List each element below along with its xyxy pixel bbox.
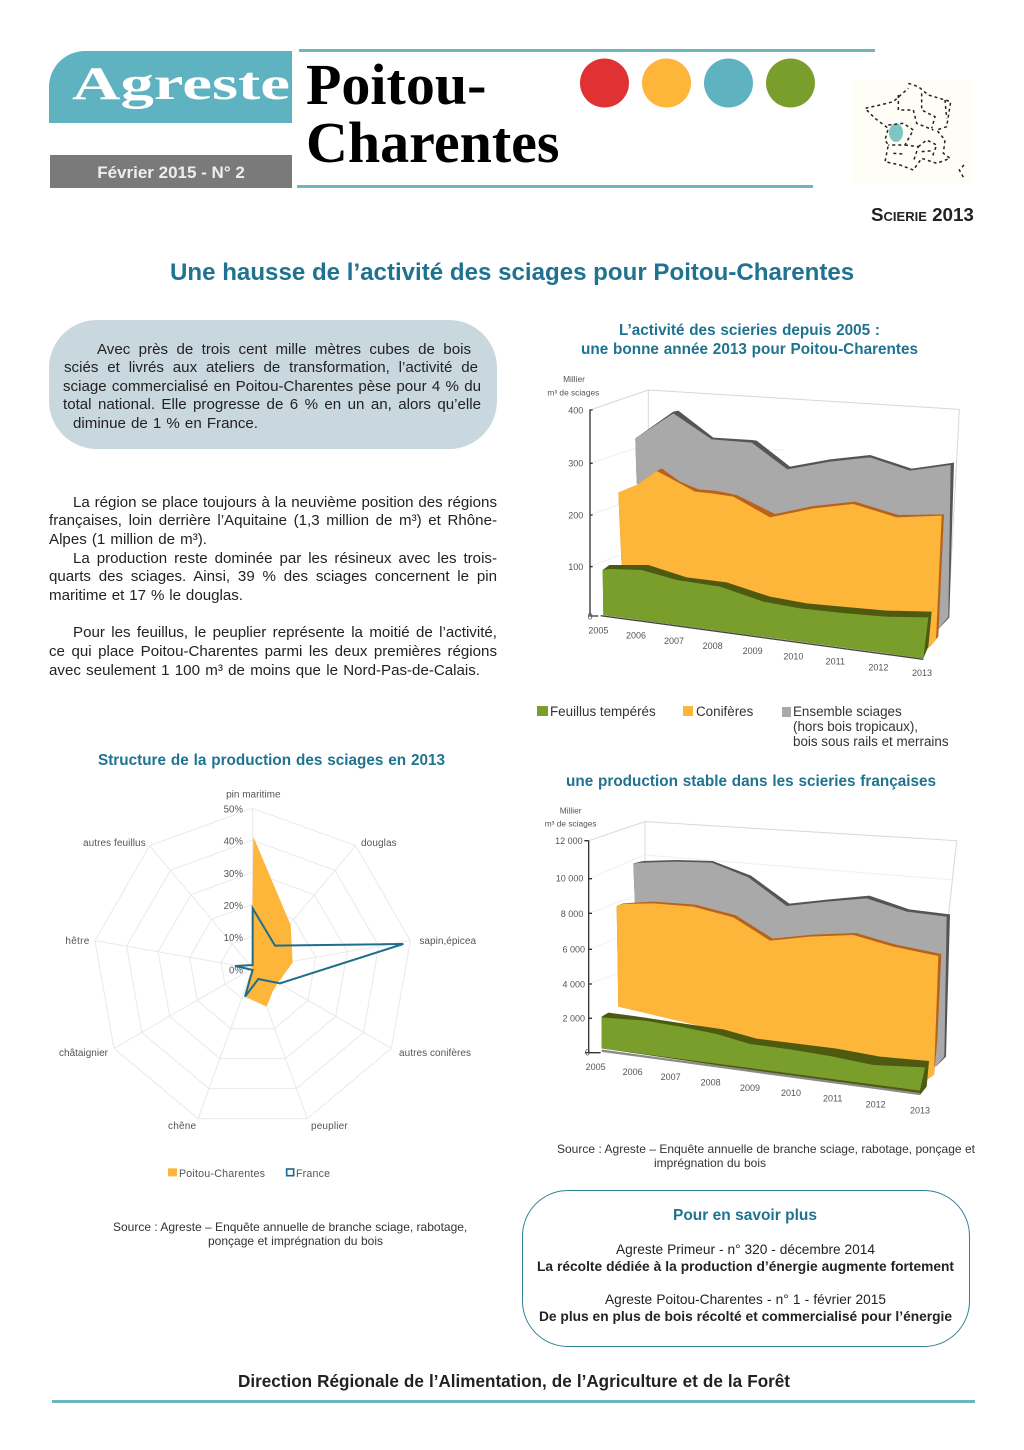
y axis labels: 200 <box>568 510 583 520</box>
body text: Alpes (1 million de m³). <box>49 531 207 548</box>
radial scale: 10% <box>224 933 243 944</box>
y axis labels: 0 <box>588 611 593 621</box>
x axis labels <box>586 1062 930 1115</box>
y axis <box>584 841 601 1053</box>
body text: La région se place toujours à la neuvième position des régions <box>73 494 497 511</box>
date band: Février 2015 - N° 2 <box>97 163 245 182</box>
category labels: peuplier <box>311 1121 348 1132</box>
body text: ce qui place Poitou-Charentes parmi les deux premières régions <box>49 643 497 660</box>
intro text <box>63 341 481 432</box>
x axis labels: 2013 <box>910 1105 930 1115</box>
y axis labels <box>555 836 590 1058</box>
radar heading: Structure de la production des sciages en 2013 <box>98 752 445 769</box>
reference 2: De plus en plus de bois récolté et commercialisé pour l’énergie <box>539 1309 952 1324</box>
x axis labels: 2010 <box>781 1088 801 1098</box>
intro text: sciés et livrés aux ateliers de transformation, l’activité de <box>64 359 478 376</box>
category labels: autres conifères <box>399 1048 471 1059</box>
chart: area 3D regional sawmill activity <box>547 374 960 678</box>
legend: ensemble: bois sous rails et merrains <box>793 734 949 749</box>
category labels: châtaignier <box>59 1048 109 1059</box>
further reading heading: Pour en savoir plus <box>673 1207 817 1224</box>
unit label: Millier <box>563 374 585 384</box>
header title: Poitou- <box>306 52 486 117</box>
radial scale: 50% <box>224 804 243 815</box>
radar legend: Poitou-Charentes <box>179 1168 265 1180</box>
body text: françaises, loin derrière l’Aquitaine (1,3 million de m³) et Rhône- <box>49 512 497 529</box>
y axis labels: 10 000 <box>556 873 583 883</box>
y axis labels: 4 000 <box>562 979 585 989</box>
radial scale: 40% <box>224 836 243 847</box>
source radar <box>113 1220 467 1248</box>
source chart 2 <box>557 1142 975 1170</box>
radar legend: France <box>296 1168 330 1180</box>
source chart 2: imprégnation du bois <box>654 1156 766 1170</box>
x axis labels: 2011 <box>826 656 845 666</box>
intro text: sciage commercialisé en Poitou-Charentes pèse pour 4 % du <box>63 378 481 395</box>
legend: ensemble: (hors bois tropicaux), <box>793 719 918 734</box>
unit label <box>545 805 597 828</box>
radial scale: 0% <box>229 965 243 976</box>
category labels: douglas <box>361 838 397 849</box>
x axis labels <box>588 625 932 678</box>
section label: Scierie 2013 <box>871 204 974 225</box>
x axis labels: 2009 <box>743 646 763 656</box>
footer rule <box>52 1400 975 1403</box>
intro text: diminue de 1 % en France. <box>73 415 258 432</box>
source radar: Source : Agreste – Enquête annuelle de branche sciage, rabotage, <box>113 1220 467 1234</box>
reference 2: Agreste Poitou-Charentes - n° 1 - février 2015 <box>605 1292 886 1307</box>
series: feuillus temperes <box>603 565 932 658</box>
x axis labels: 2006 <box>623 1067 643 1077</box>
y axis labels: 300 <box>568 459 583 469</box>
x axis labels: 2006 <box>626 630 646 640</box>
icon: map of France with Poitou-Charentes highlighted <box>854 80 973 183</box>
x axis labels: 2013 <box>912 668 932 678</box>
body text: Pour les feuillus, le peuplier représente la moitié de l’activité, <box>73 624 497 641</box>
series: ensemble sciages <box>633 860 950 1067</box>
legend: feuillus: Feuillus tempérés <box>550 704 656 719</box>
reference 1 <box>537 1242 954 1274</box>
body text: La production reste dominée par les résineux avec les trois- <box>73 550 497 567</box>
y axis labels: 100 <box>568 562 583 572</box>
series: France <box>235 908 403 997</box>
reference 2 <box>539 1292 952 1324</box>
header title: Charentes <box>306 110 559 175</box>
x axis labels: 2012 <box>866 1099 886 1109</box>
x axis labels: 2005 <box>588 625 608 635</box>
y axis labels: 0 <box>585 1048 590 1058</box>
body text: maritime et 17 % le douglas. <box>49 587 243 604</box>
intro text: total national. Elle progresse de 6 % en un an, alors qu’elle <box>63 396 481 413</box>
x axis labels: 2005 <box>586 1062 606 1072</box>
series: ensemble sciages <box>635 411 954 629</box>
x axis labels: 2007 <box>664 636 684 646</box>
x axis labels: 2008 <box>703 641 723 651</box>
chart 1 heading <box>581 322 918 358</box>
chart 1 heading: une bonne année 2013 pour Poitou-Charentes <box>581 341 918 358</box>
header: Agreste logo block <box>49 51 292 123</box>
x axis labels: 2011 <box>823 1094 842 1104</box>
category labels: chêne <box>168 1121 196 1132</box>
legend: coniferes: Conifères <box>696 704 753 719</box>
radar legend <box>168 1168 330 1180</box>
x axis labels: 2012 <box>868 663 888 673</box>
category labels <box>59 789 476 1132</box>
y axis labels: 6 000 <box>562 945 585 955</box>
intro text: Avec près de trois cent mille mètres cubes de bois <box>97 341 471 358</box>
series: feuillus temperes <box>602 1013 929 1095</box>
x axis labels: 2009 <box>740 1083 760 1093</box>
body text: quarts des sciages. Ainsi, 39 % des sciages concernent le pin <box>49 568 497 585</box>
header rule top <box>299 49 875 52</box>
chart 1 legend <box>537 704 949 749</box>
y axis <box>589 410 598 617</box>
radial scale: 30% <box>224 869 243 880</box>
unit label: Millier <box>560 805 582 815</box>
chart: radar structure of production <box>59 789 476 1180</box>
reference 1: La récolte dédiée à la production d’énergie augmente fortement <box>537 1259 954 1274</box>
x axis labels: 2010 <box>783 651 803 661</box>
body text <box>49 494 497 679</box>
radial scale: 20% <box>224 901 243 912</box>
legend: ensemble <box>782 704 949 749</box>
unit label: m³ de sciages <box>547 388 599 398</box>
legend: ensemble: Ensemble sciages <box>793 704 902 719</box>
header rule bottom <box>297 185 813 188</box>
date band <box>50 155 292 188</box>
chart: area 3D French sawmills <box>545 805 958 1115</box>
y axis labels: 12 000 <box>555 836 583 846</box>
x axis labels: 2008 <box>701 1078 721 1088</box>
source radar: ponçage et imprégnation du bois <box>208 1234 383 1248</box>
category labels: pin maritime <box>226 789 281 800</box>
category labels: sapin,épicea <box>419 936 476 947</box>
panel: further reading <box>522 1190 970 1347</box>
category labels: hêtre <box>65 936 90 947</box>
category labels: autres feuillus <box>83 838 146 849</box>
body text: avec seulement 1 100 m³ de moins que le Nord-Pas-de-Calais. <box>49 662 480 679</box>
chart 1 heading: L’activité des scieries depuis 2005 : <box>619 322 880 339</box>
x axis labels: 2007 <box>661 1072 681 1082</box>
series: coniferes <box>618 468 944 648</box>
coloured dots <box>580 58 815 108</box>
panel: intro box <box>49 320 497 449</box>
reference 1: Agreste Primeur - n° 320 - décembre 2014 <box>616 1242 875 1257</box>
unit label: m³ de sciages <box>545 818 597 828</box>
chart 2 heading: une production stable dans les scieries françaises <box>566 773 936 790</box>
y axis labels: 8 000 <box>561 909 583 919</box>
y axis labels: 400 <box>568 405 583 415</box>
unit label <box>547 374 599 398</box>
y axis labels <box>568 405 593 621</box>
series: coniferes <box>617 902 941 1080</box>
header title <box>306 52 559 175</box>
footer text: Direction Régionale de l’Alimentation, de l’Agriculture et de la Forêt <box>238 1372 790 1391</box>
radial scale <box>224 804 243 976</box>
main heading: Une hausse de l’activité des sciages pour Poitou-Charentes <box>170 259 854 286</box>
series: Poitou-Charentes <box>245 837 293 1007</box>
source chart 2: Source : Agreste – Enquête annuelle de branche sciage, rabotage, ponçage et <box>557 1142 975 1156</box>
y axis labels: 2 000 <box>562 1014 585 1024</box>
header: Agreste logo block: Agreste <box>72 58 290 110</box>
